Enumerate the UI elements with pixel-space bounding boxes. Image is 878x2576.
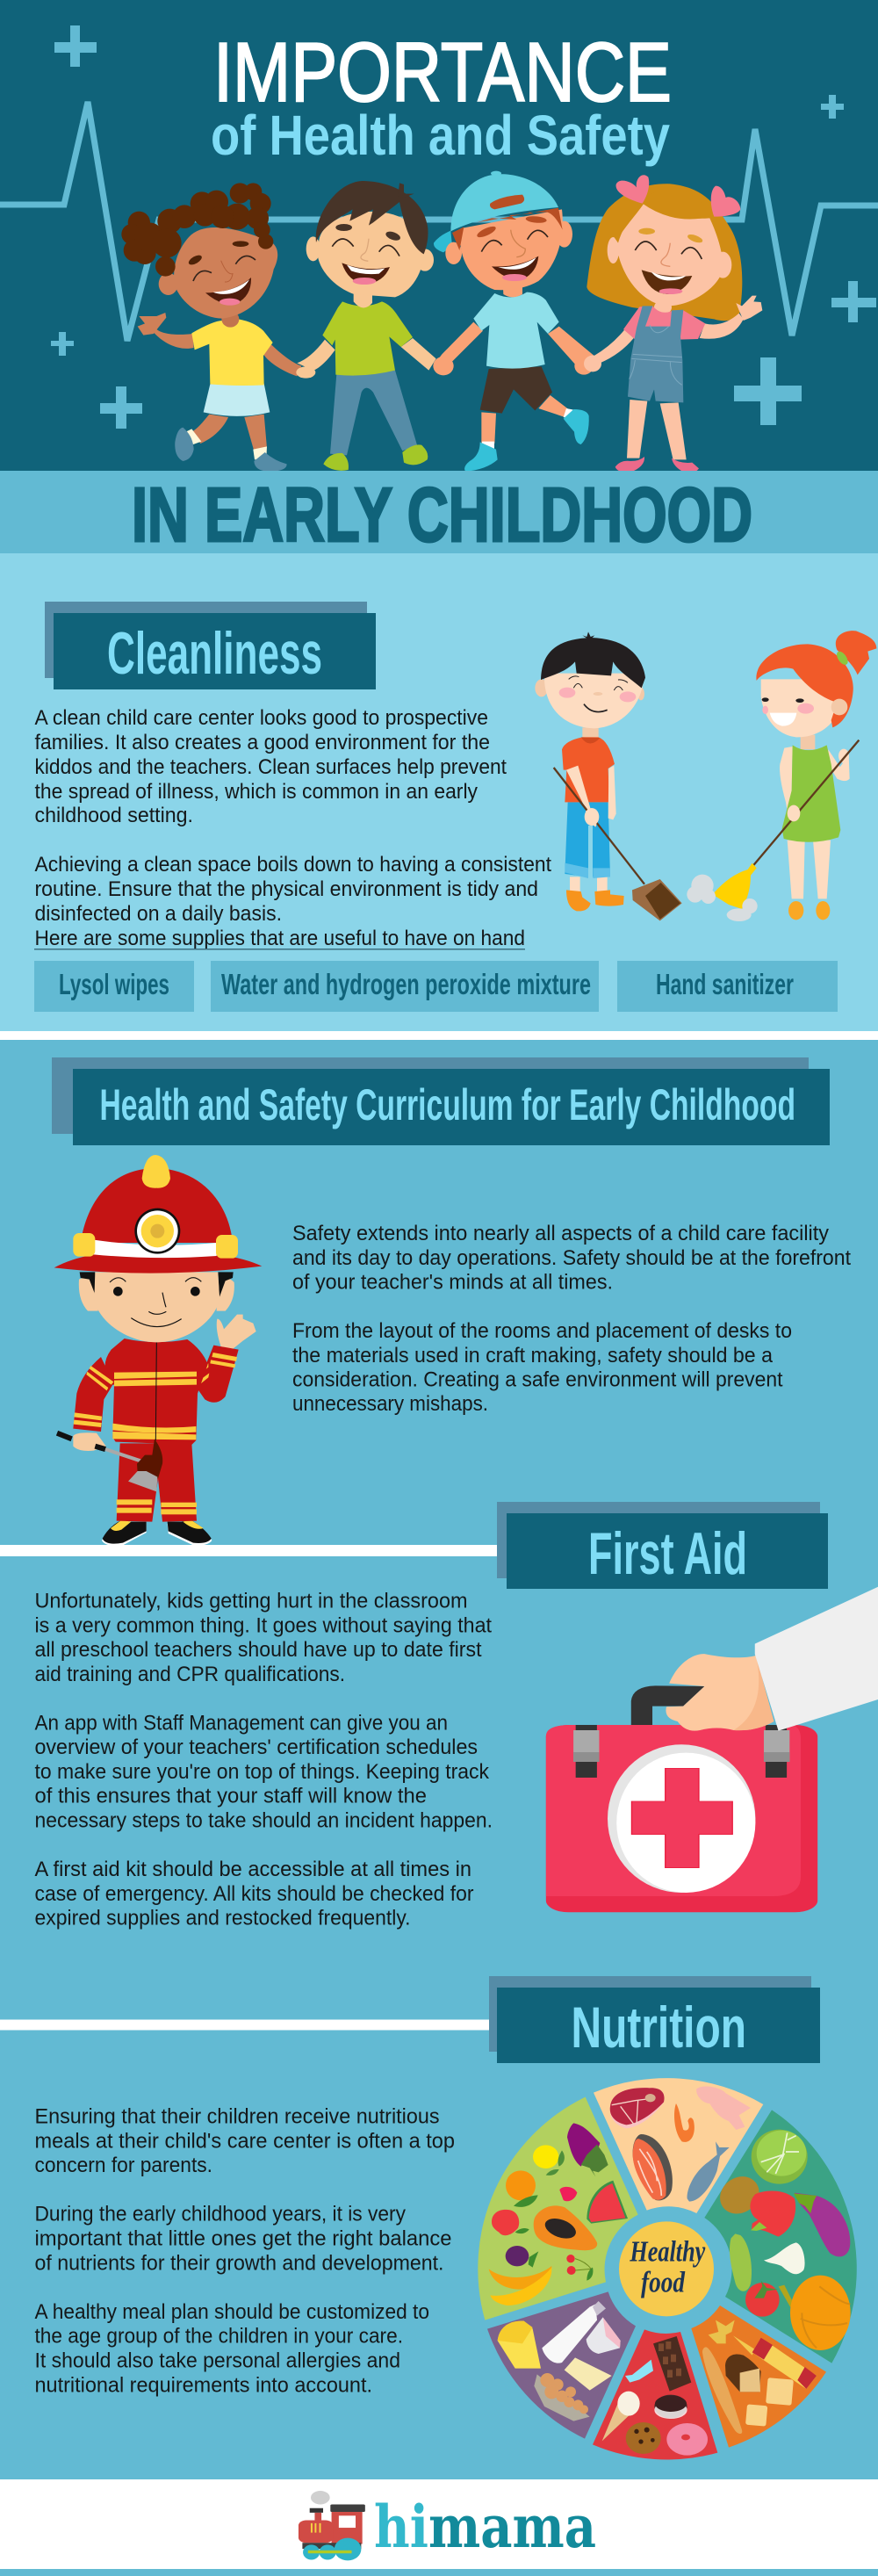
text block: cleanliness intro: routine. Ensure that the physical environment is tidy and bbox=[35, 877, 538, 901]
text block: curriculum: unnecessary mishaps. bbox=[292, 1392, 488, 1416]
text block: nutrition: Ensuring that their children receive nutritious bbox=[35, 2104, 439, 2129]
wedge: fruit bbox=[478, 2097, 638, 2320]
wedge: meat and fish bbox=[594, 2078, 763, 2213]
text block: cleanliness intro: Achieving a clean space boils down to having a consistent bbox=[35, 853, 551, 877]
logo: wordmark: himama bbox=[374, 2493, 596, 2561]
text block: curriculum: From the layout of the rooms and placement of desks to bbox=[292, 1319, 792, 1343]
text block: first aid: to make sure you're on top of things. Keeping track bbox=[35, 1760, 490, 1784]
text block: first aid: aid training and CPR qualifications. bbox=[35, 1663, 345, 1686]
text block: cleanliness intro bbox=[35, 706, 551, 926]
text block: curriculum bbox=[292, 1222, 851, 1416]
text block: nutrition: the age group of the children in your care. bbox=[35, 2324, 403, 2349]
title: IMPORTANCE bbox=[213, 25, 672, 119]
text block: nutrition: important that little ones get the right balance bbox=[35, 2227, 451, 2250]
text block: nutrition bbox=[35, 2104, 455, 2398]
divider bbox=[0, 2020, 489, 2031]
text block: first aid: A first aid kit should be accessible at all times in bbox=[35, 1858, 471, 1881]
illustration: firefighter bbox=[54, 1155, 262, 1546]
child 4 bbox=[584, 175, 762, 473]
text block: first aid: Unfortunately, kids getting hurt in the classroom bbox=[35, 1590, 467, 1613]
supply: lysol wipes: Lysol wipes bbox=[59, 968, 169, 1000]
text block: nutrition: of nutrients for their growth and development. bbox=[35, 2252, 444, 2275]
title: of Health and Safety bbox=[211, 104, 670, 167]
text block: curriculum: consideration. Creating a safe environment will prevent bbox=[292, 1368, 783, 1391]
text block: cleanliness intro: disinfected on a daily basis. bbox=[35, 902, 282, 926]
text block: nutrition: nutritional requirements into account. bbox=[35, 2373, 372, 2398]
text block: cleanliness intro: childhood setting. bbox=[35, 804, 193, 827]
wedge: sweets bbox=[593, 2329, 717, 2459]
child 3 bbox=[433, 171, 594, 472]
illustration: children sweeping bbox=[535, 631, 876, 921]
text block: first aid bbox=[35, 1590, 493, 1930]
girl with broom bbox=[687, 631, 876, 921]
illustration: children right pair bbox=[433, 171, 762, 473]
text block: first aid: is a very common thing. It goes without saying that bbox=[35, 1614, 492, 1637]
supply: lysol wipes bbox=[34, 961, 194, 1012]
heartbeat line bbox=[0, 102, 878, 341]
text block: nutrition: During the early childhood years, it is very bbox=[35, 2203, 406, 2226]
wheel centre: healthy food: food bbox=[641, 2266, 686, 2298]
text block: curriculum: Safety extends into nearly all aspects of a child care facility bbox=[292, 1222, 829, 1245]
text block: curriculum: of your teacher's minds at all times. bbox=[292, 1270, 613, 1295]
heading: first aid bbox=[497, 1502, 828, 1589]
supply: hand sanitizer: Hand sanitizer bbox=[656, 968, 794, 1000]
text block: first aid: necessary steps to take should an incident happen. bbox=[35, 1809, 493, 1832]
wedge: vegetables bbox=[704, 2110, 857, 2363]
text block: nutrition: meals at their child's care center is often a top bbox=[35, 2129, 455, 2154]
food wheel bbox=[478, 2078, 857, 2459]
wheel centre: healthy food: Healthy bbox=[630, 2235, 705, 2268]
text block: first aid: An app with Staff Management can give you an bbox=[35, 1711, 448, 1735]
heading: curriculum bbox=[52, 1057, 830, 1145]
text block: first aid: expired supplies and restocked frequently. bbox=[35, 1906, 411, 1930]
supply: water and hydrogen peroxide: Water and hydrogen peroxide mixture bbox=[221, 968, 591, 1000]
wedge: grains bbox=[691, 2305, 826, 2448]
text block: cleanliness intro: kiddos and the teachers. Clean surfaces help prevent bbox=[35, 755, 507, 779]
text block: curriculum: the materials used in craft making, safety should be a bbox=[292, 1344, 774, 1367]
text block: nutrition: concern for parents. bbox=[35, 2154, 212, 2177]
logo: train bbox=[299, 2491, 365, 2560]
boy with dustpan bbox=[535, 631, 682, 920]
text block: first aid: case of emergency. All kits should be checked for bbox=[35, 1882, 474, 1906]
divider bbox=[0, 1545, 498, 1556]
text block: nutrition: A healthy meal plan should be customized to bbox=[35, 2300, 429, 2324]
text block: cleanliness intro: families. It also creates a good environment for the bbox=[35, 731, 490, 754]
supplies intro with underline: Here are some supplies that are useful to have on hand bbox=[35, 927, 525, 950]
text block: first aid: overview of your teachers' certification schedules bbox=[35, 1735, 478, 1759]
text block: first aid: of this ensures that your staff will know the bbox=[35, 1785, 427, 1808]
illustration: children left pair bbox=[121, 181, 436, 472]
text block: cleanliness intro: A clean child care center looks good to prospective bbox=[35, 706, 488, 730]
panel: first aid bbox=[35, 1502, 878, 1930]
wedge: dairy bbox=[487, 2291, 636, 2439]
text block: cleanliness intro: the spread of illness, which is common in an early bbox=[35, 780, 478, 804]
illustration: first aid kit held by hand bbox=[546, 1587, 878, 1912]
heading: cleanliness: Cleanliness bbox=[107, 620, 322, 687]
plus icons bbox=[51, 25, 876, 429]
child 2 bbox=[296, 181, 436, 471]
panel: cleanliness bbox=[0, 553, 878, 1031]
text block: first aid: all preschool teachers should have up to date first bbox=[35, 1638, 482, 1662]
divider bbox=[0, 1031, 878, 1040]
panel: nutrition bbox=[35, 1976, 857, 2459]
panel: curriculum bbox=[0, 1057, 851, 1556]
footer bbox=[0, 2479, 878, 2569]
panel: header bbox=[0, 0, 878, 473]
text block: curriculum: and its day to day operations. Safety should be at the forefront bbox=[292, 1246, 851, 1270]
heading: nutrition bbox=[489, 1976, 820, 2063]
child 1 bbox=[121, 183, 301, 472]
heading: first aid: First Aid bbox=[588, 1520, 747, 1587]
supply: hand sanitizer bbox=[617, 961, 838, 1012]
heading: nutrition: Nutrition bbox=[571, 1995, 746, 2060]
wheel centre: healthy food bbox=[619, 2221, 714, 2316]
title bbox=[211, 25, 672, 167]
text block: nutrition: It should also take personal allergies and bbox=[35, 2349, 400, 2373]
heading: cleanliness bbox=[45, 602, 376, 689]
supply: water and hydrogen peroxide bbox=[211, 961, 599, 1012]
